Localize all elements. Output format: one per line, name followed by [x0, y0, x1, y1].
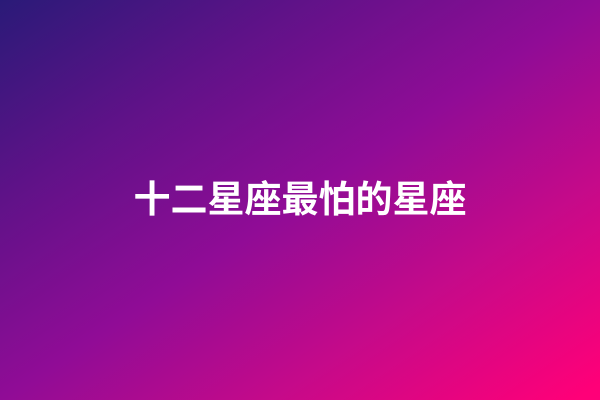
- title: 十二星座最怕的星座: [134, 179, 466, 220]
